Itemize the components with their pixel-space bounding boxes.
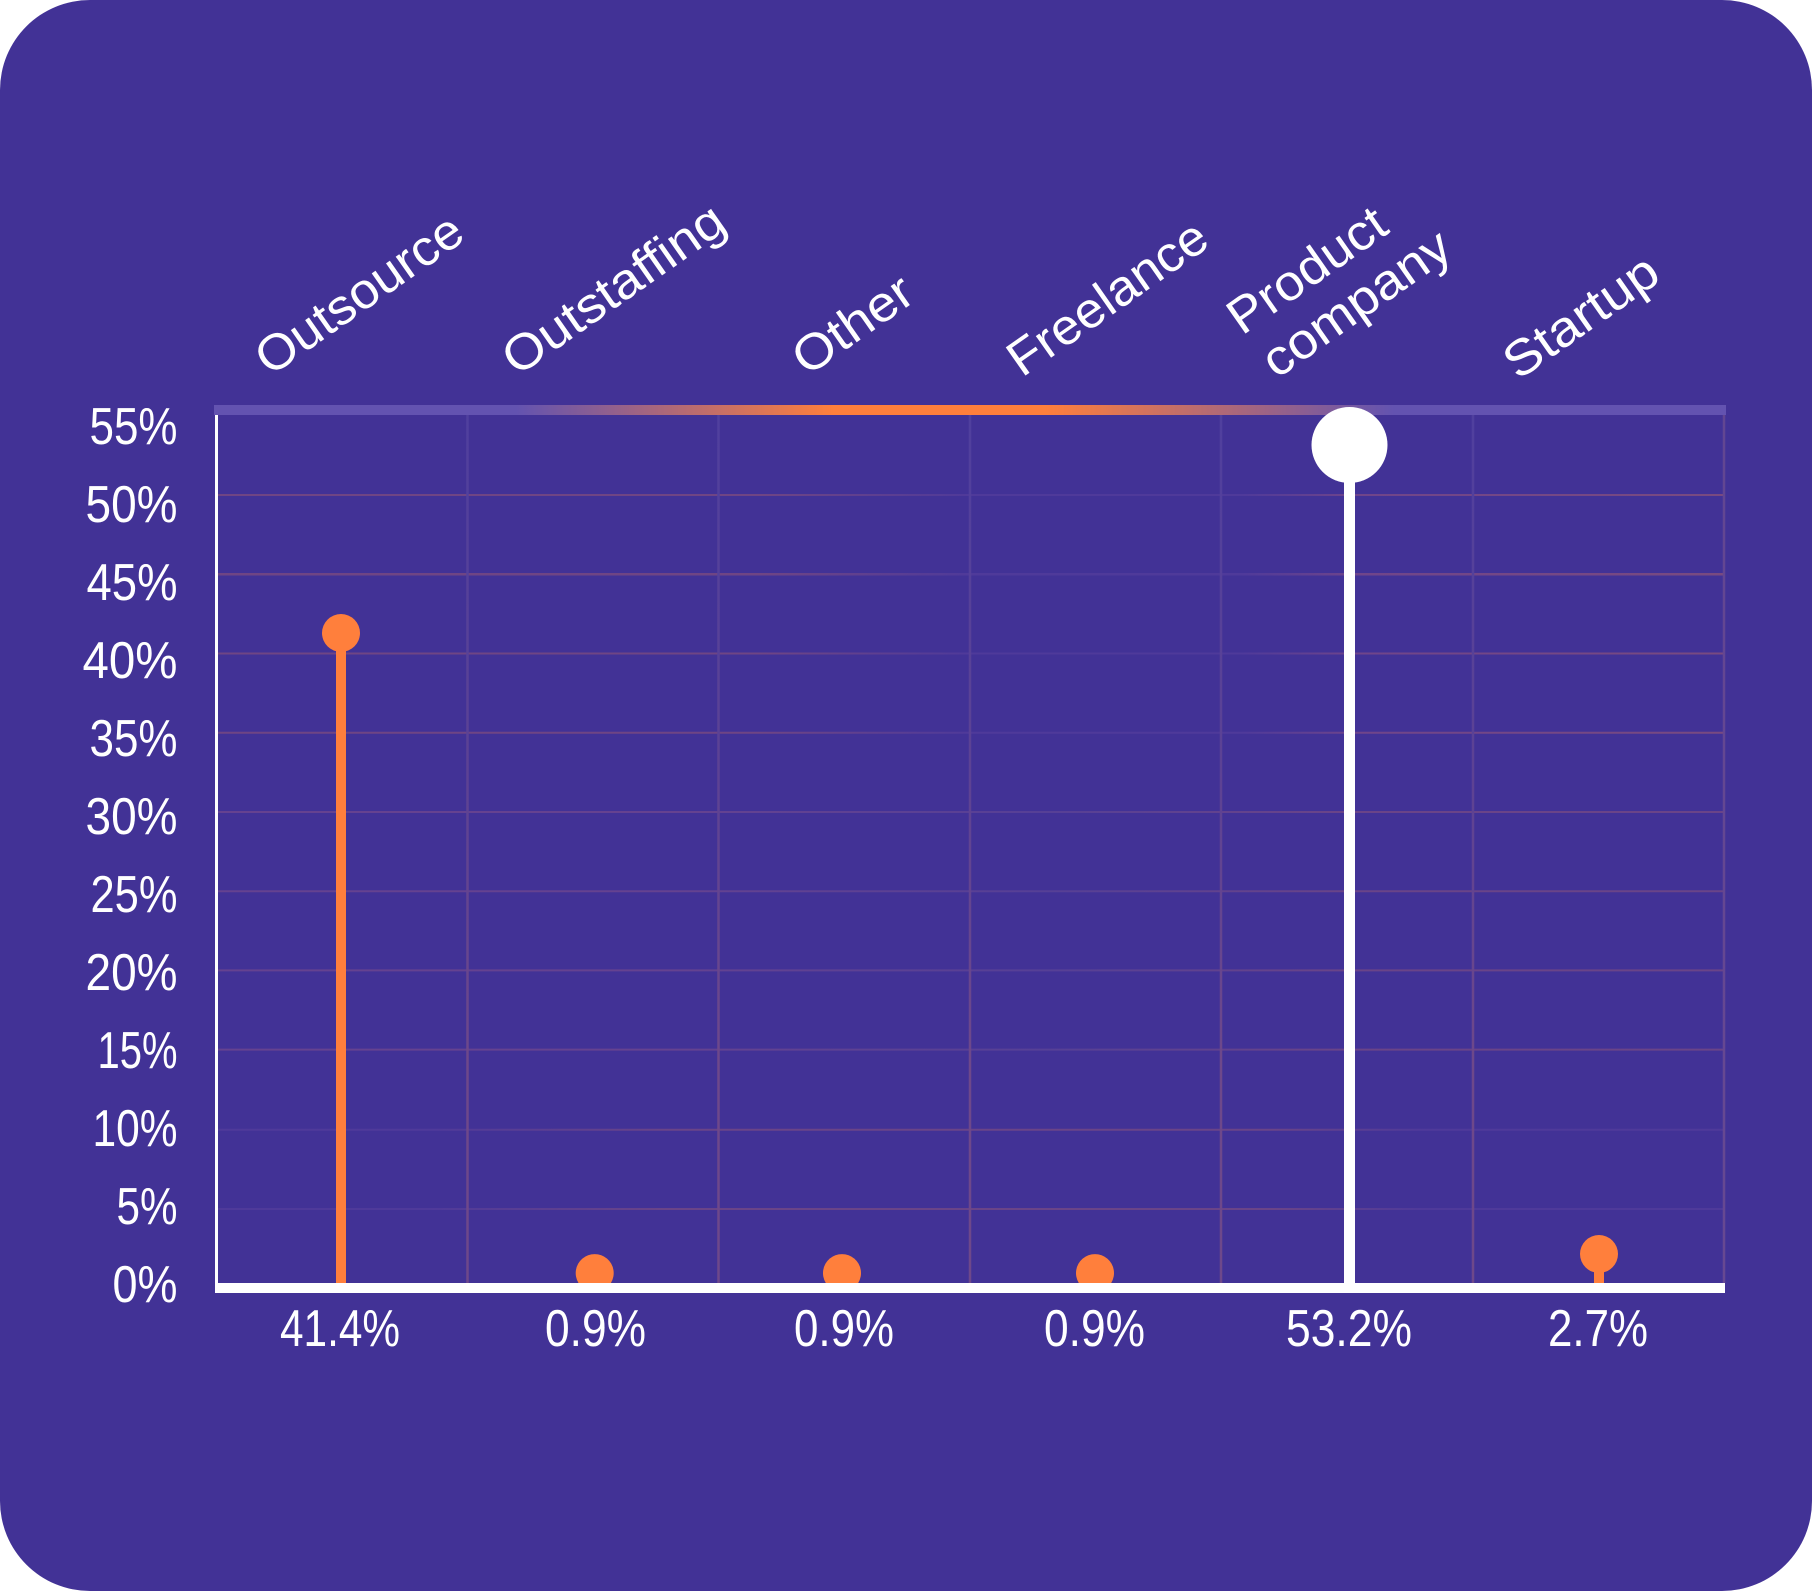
y axis labels (82, 398, 178, 1314)
y axis labels: 0% (112, 1256, 178, 1314)
lollipop: Other 0.9% (823, 1254, 861, 1283)
label: Startup: Startup (1492, 243, 1669, 390)
y axis labels: 10% (92, 1100, 178, 1158)
y axis labels: 35% (90, 710, 178, 768)
y axis labels: 20% (86, 944, 178, 1002)
label: Outsource: Outsource (244, 202, 474, 386)
lollipop: Startup 2.7% (1580, 1235, 1618, 1283)
value labels (280, 1300, 1648, 1358)
lollipop: Product company 53.2% (1312, 407, 1388, 1283)
y axis labels: 30% (86, 788, 178, 846)
value labels: 0.9% (1044, 1300, 1145, 1358)
chart grid (218, 415, 1724, 1283)
top gradient bar (214, 405, 1726, 415)
y axis labels: 15% (98, 1022, 178, 1080)
lollipop: Freelance 0.9% (1076, 1254, 1114, 1283)
value labels: 0.9% (794, 1300, 894, 1358)
label: Product company: company (1251, 218, 1461, 389)
lollipop: Outstaffing 0.9% (576, 1254, 614, 1283)
y axis labels: 50% (86, 476, 178, 534)
value labels: 41.4% (280, 1300, 400, 1358)
y axis labels: 5% (116, 1178, 178, 1236)
horizontal axis (215, 1283, 1725, 1293)
label: Outstaffing: Outstaffing (491, 192, 735, 386)
y axis labels: 40% (82, 632, 178, 690)
y axis labels: 25% (90, 866, 178, 924)
lollipop: Outsource 41.4% (322, 614, 360, 1283)
label: Product company: Product (1216, 195, 1397, 345)
vertical axis (215, 415, 218, 1285)
y axis labels: 45% (86, 554, 178, 612)
value labels: 0.9% (545, 1300, 646, 1358)
y axis labels: 55% (90, 398, 178, 456)
value labels: 53.2% (1286, 1300, 1412, 1358)
label: Other: Other (781, 263, 924, 386)
category labels (244, 192, 1669, 390)
label: Product company (1216, 195, 1461, 389)
value labels: 2.7% (1548, 1300, 1648, 1358)
label: Freelance: Freelance (996, 208, 1218, 387)
